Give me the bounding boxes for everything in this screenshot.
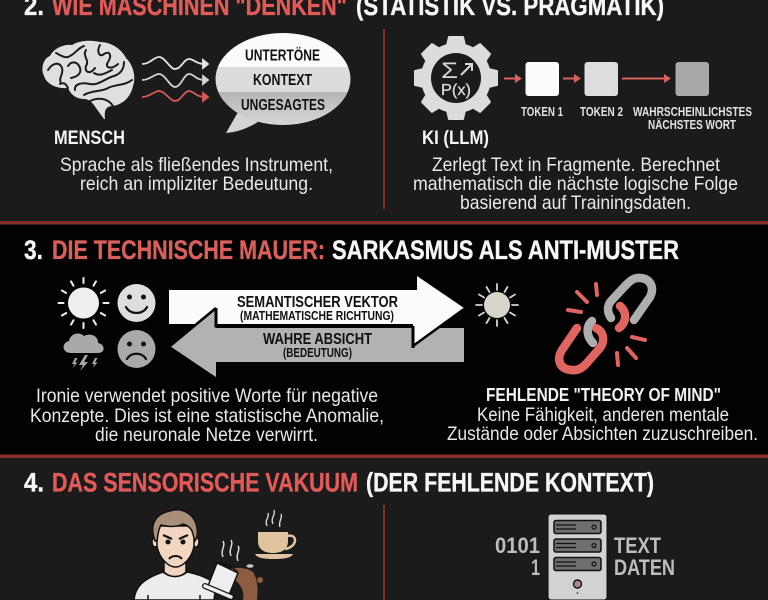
- text: irony description: Ironie verwendet positive Worte für negative: [36, 385, 378, 407]
- arrows: vector versus intent: WAHRE ABSICHT: [263, 331, 372, 348]
- speech bubble: KONTEXT: [253, 72, 312, 89]
- icon: server: [548, 514, 607, 600]
- text: theory of mind: [447, 385, 758, 445]
- text: text data label: TEXT: [614, 533, 661, 558]
- heading: section 2: [24, 0, 664, 21]
- panel background: section 3: [0, 224, 768, 455]
- icon: frowning face: [118, 330, 156, 368]
- text: text data label: [614, 533, 675, 580]
- text: irony description: Konzepte. Dies ist eine statistische Anomalie,: [30, 405, 384, 427]
- heading: section 3: [24, 235, 679, 265]
- text: theory of mind: Keine Fähigkeit, anderen mentale: [477, 404, 729, 426]
- arrows: vector versus intent: (BEDEUTUNG): [283, 346, 352, 360]
- token chain: NÄCHSTES WORT: [648, 117, 736, 132]
- arrows: vector versus intent: SEMANTISCHER VEKTOR: [237, 294, 398, 311]
- heading: section 3: SARKASMUS ALS ANTI-MUSTER: [332, 235, 679, 265]
- text: Mensch description: Sprache als fließendes Instrument,: [60, 154, 333, 176]
- token chain: [504, 62, 752, 132]
- speech bubble: [215, 33, 351, 133]
- arrows: vector versus intent: (MATHEMATISCHE RICHTUNG): [240, 309, 394, 323]
- speech bubble: UNTERTÖNE: [245, 48, 320, 64]
- icon: wavy arrows: [142, 57, 208, 101]
- heading: section 4: [24, 468, 654, 498]
- text: binary digits: [495, 533, 540, 580]
- icon: coffee cup: [255, 510, 295, 559]
- icon: storm cloud: [64, 334, 104, 371]
- panel background: section 2: [0, 0, 768, 222]
- text: KI description: mathematisch die nächste logische Folge: [413, 173, 738, 195]
- panel: Mensch mit Kaffee: [134, 510, 295, 600]
- heading: section 3: 3.: [24, 235, 43, 265]
- icon: sun: [58, 278, 108, 328]
- icon: gear with formula: Σ: [441, 58, 458, 83]
- text: irony description: die neuronale Netze verwirrt.: [95, 424, 318, 446]
- label: Mensch: MENSCH: [54, 127, 125, 149]
- panel: Mensch: [42, 33, 351, 195]
- token chain: TOKEN 1: [521, 104, 563, 119]
- text: binary digits: 1: [531, 555, 540, 580]
- icon: smiling face: [118, 284, 156, 322]
- text: binary digits: 0101: [495, 533, 540, 558]
- text: theory of mind: FEHLENDE "THEORY OF MIND": [486, 385, 721, 405]
- token chain: TOKEN 2: [580, 104, 623, 119]
- icon: small sun: [476, 284, 518, 326]
- icon: angry person: [134, 510, 216, 600]
- text: KI description: Zerlegt Text in Fragmente. Berechnet: [432, 154, 721, 176]
- icon: gear with formula: [398, 20, 514, 136]
- text: Mensch description: reich an impliziter Bedeutung.: [80, 173, 313, 195]
- icon: brain: [42, 41, 134, 119]
- heading: section 4: 4.: [24, 468, 44, 498]
- icon: gear with formula: P(x): [441, 82, 471, 99]
- text: KI description: basierend auf Trainingsdaten.: [460, 192, 691, 214]
- heading: section 4: DAS SENSORISCHE VAKUUM: [52, 468, 358, 498]
- heading: section 4: (DER FEHLENDE KONTEXT): [366, 468, 654, 498]
- speech bubble: UNGESAGTES: [241, 97, 325, 114]
- text: text data label: DATEN: [614, 555, 675, 580]
- panel background: section 4: [0, 458, 768, 600]
- arrows: vector versus intent: [169, 276, 464, 377]
- text: irony description: [30, 385, 384, 446]
- icon: broken chain: [559, 278, 652, 370]
- icon: spilled coffee: [205, 540, 263, 600]
- panel: KI (LLM): [398, 20, 752, 214]
- text: Mensch description: [60, 154, 333, 195]
- text: KI description: [413, 154, 738, 214]
- panel: Server: [495, 514, 675, 600]
- label: KI (LLM): KI (LLM): [422, 127, 489, 149]
- heading: section 3: DIE TECHNISCHE MAUER:: [52, 235, 325, 265]
- panel: Sarkasmus: [30, 276, 758, 446]
